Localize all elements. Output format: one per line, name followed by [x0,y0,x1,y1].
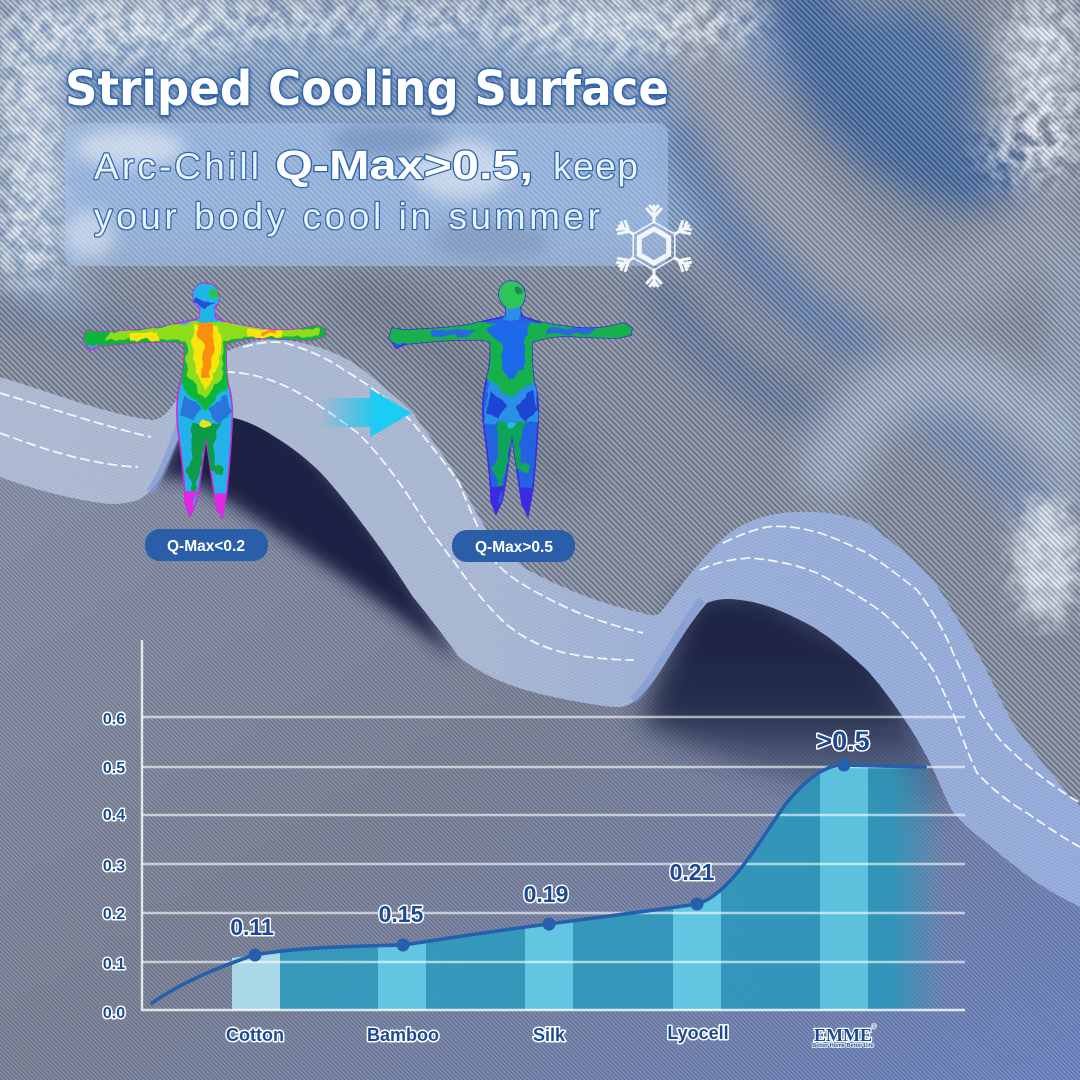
fold rims [150,425,702,700]
value labels: 0.11 [230,914,274,940]
grid lines [142,640,965,1010]
value labels: 0.21 [670,859,715,885]
panel text: keep [553,146,638,187]
arrow [320,389,412,437]
logo: EMME [812,1023,877,1049]
lower cloth surface [0,390,1080,1080]
panel text: your body cool in summer [94,196,600,237]
value labels: 0.19 [524,881,568,907]
x axis labels: Bamboo [367,1025,439,1045]
y axis labels [103,711,125,1022]
x axis labels [226,1023,729,1045]
area under curve [232,760,965,1010]
y axis labels: 0.5 [103,760,125,777]
logo: EMME: EMME [814,1025,872,1045]
panel text [94,142,638,237]
value labels: 0.15 [379,901,424,927]
y axis labels: 0.4 [103,807,125,824]
panel text: Arc-Chill [94,146,259,187]
icon: snowflake [616,206,692,286]
value labels [230,726,870,940]
stitch lines [0,342,1080,847]
panel text: Q-Max>0.5, [275,142,533,188]
fabric hem band [0,339,1080,907]
title: Striped Cooling Surface [65,61,669,117]
logo: EMME: ® [871,1023,877,1031]
y axis labels: 0.1 [103,956,125,973]
x axis labels: Cotton [226,1025,284,1045]
pill: Q-Max above 0.5 [452,530,575,562]
y axis labels: 0.3 [103,858,125,875]
data points [248,758,850,962]
info panel [65,123,668,266]
pill: Q-Max below 0.2 [145,529,268,561]
x axis labels: Lyocell [667,1023,729,1043]
y axis labels: 0.6 [103,711,125,728]
x axis labels: Silk [533,1025,566,1045]
y axis labels: 0.2 [103,906,125,923]
frost in panel [65,124,550,260]
blue and gray stripe shading [0,0,1070,520]
frost crystals [0,0,1080,625]
thermal body: cool, Q-Max above 0.5 [386,281,636,518]
value labels: >0.5 [816,726,870,756]
shadow under fabric folds [160,400,980,850]
logo: EMME: Better Home Better Life [812,1043,874,1049]
pill: Q-Max above 0.5: Q-Max>0.5 [475,539,553,556]
curve line [152,765,925,1003]
thermal body: hot, Q-Max below 0.2 [80,283,330,520]
chart: Q-Max by fabric [103,640,965,1049]
y axis labels: 0.0 [103,1005,125,1022]
pill: Q-Max below 0.2: Q-Max<0.2 [167,538,245,555]
